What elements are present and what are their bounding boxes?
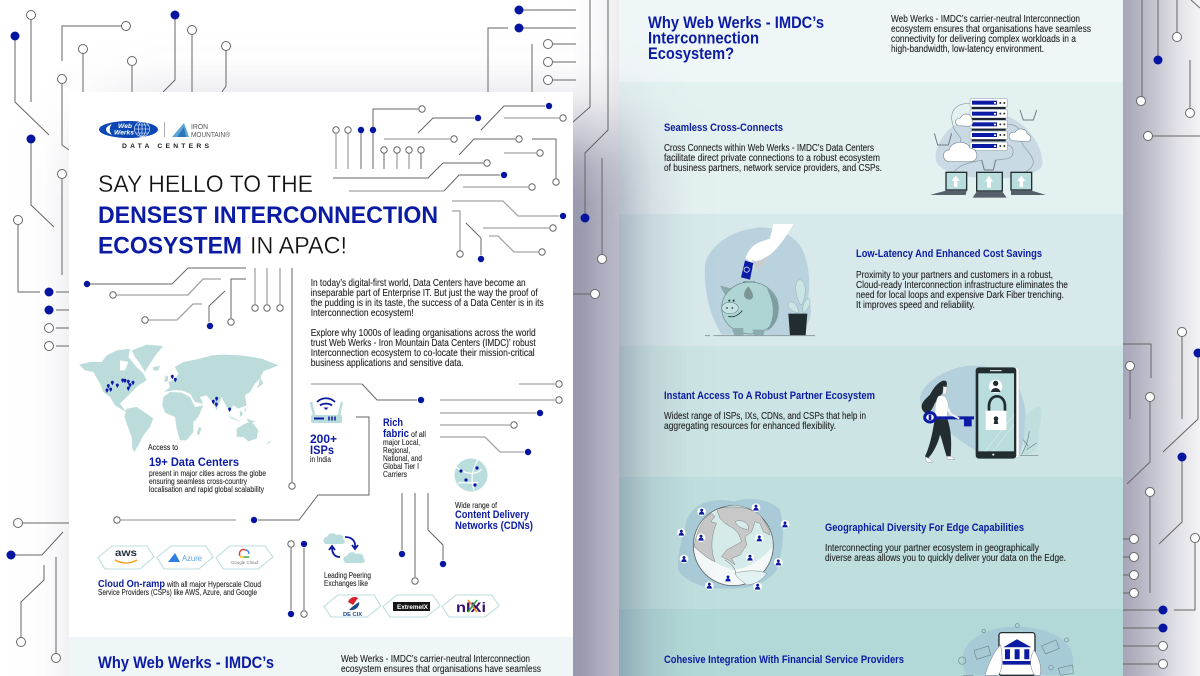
heading: why web werks: Interconnection (648, 30, 759, 48)
section: low-latency and cost savings: Proximity to your partners and customers in a robust, (856, 270, 1053, 281)
text: intro paragraphs: Explore why 1000s of leading organisations across the world (311, 328, 536, 339)
section: low-latency and cost savings: need for local loops and expensive Dark Fiber trenching. (856, 290, 1064, 301)
icon: clouds with exchange arrows (323, 533, 365, 563)
badge: de-cix: DE CIX (343, 612, 362, 618)
text: lower strip intro: Web Werks - IMDC’s carrier-neutral Interconnection (341, 654, 530, 665)
text: cloud on-ramp: Cloud On-ramp (98, 578, 165, 590)
text: 19+ data centers: Access to (148, 443, 178, 452)
circuit: page traces (84, 103, 566, 617)
text: 200+ ISPs: ISPs (310, 443, 334, 457)
text: 19+ data centers (148, 443, 266, 494)
text: cloud on-ramp: with all major Hyperscale Cloud (166, 580, 261, 589)
badge: extremeix: ExtremeIX (397, 604, 429, 611)
section: low-latency and cost savings (856, 248, 1068, 311)
heading: why web werks, lower strip: Why Web Werks - IMDC’s (98, 654, 274, 672)
logo: web werks and iron mountain data centers: MOUNTAIN® (191, 130, 230, 139)
text: leading peering exchanges: Exchanges like (324, 579, 368, 588)
text: intro paragraphs: trust Web Werks - Iron Mountain Data Centers (IMDC)’ robust (311, 338, 536, 349)
section: seamless cross-connects: Cross Connects within Web Werks - IMDC’s Data Centers (664, 143, 874, 154)
badge: nixi: nIXi (456, 599, 486, 615)
section: instant access to partner ecosystem: aggregating resources for enhanced flexibility. (664, 421, 836, 432)
icon: woman with key and phone lock (920, 366, 1042, 463)
text: rich fabric of carriers: major Local, (383, 438, 420, 447)
section: seamless cross-connects: facilitate direct private connections to a robust ecosystem (664, 153, 880, 164)
logo: web werks and iron mountain data centers: IRON (191, 122, 208, 131)
text: leading peering exchanges: Leading Peering (324, 571, 371, 580)
text: 200+ ISPs: in India (310, 455, 331, 464)
text: cloud on-ramp: Service Providers (CSPs) like AWS, Azure, and Google (98, 588, 257, 597)
section: seamless cross-connects: Seamless Cross-Connects (664, 122, 783, 134)
badge: aws: aws (115, 547, 137, 559)
text: intro paragraphs: Interconnection ecosystem! (311, 308, 414, 319)
section: seamless cross-connects: of business partners, network service providers, and CSPs. (664, 163, 882, 174)
badge: google cloud (216, 546, 273, 569)
text: ecosystem intro: connectivity for delivering complex workloads in a (891, 34, 1076, 45)
title: DENSEST INTERCONNECTION (98, 202, 438, 229)
text: leading peering exchanges (324, 571, 371, 588)
text: ecosystem intro: ecosystem ensures that organisations have seamless (891, 24, 1091, 35)
text: content delivery networks: Wide range of (455, 501, 498, 510)
badge: extremeix (383, 595, 440, 617)
text: intro paragraphs: In today’s digital-first world, Data Centers have become an (311, 278, 526, 289)
text: lower strip intro (341, 654, 541, 675)
text: intro paragraphs (311, 278, 544, 369)
section: geographical diversity (825, 522, 1066, 564)
logo: web werks and iron mountain data centers (99, 121, 230, 150)
text: intro paragraphs: the pudding is in its taste, the success of a Data Center is in its (311, 298, 544, 309)
section: geographical diversity: Interconnecting your partner ecosystem in geographically (825, 543, 1039, 554)
section: low-latency and cost savings: It improves speed and reliability. (856, 300, 975, 311)
icon: bank on phone with payment cards (959, 624, 1073, 675)
heading: why web werks: Why Web Werks - IMDC’s (648, 14, 824, 32)
section: geographical diversity: diverse areas allows you to quickly deliver your data on the Edge. (825, 553, 1066, 564)
title: ECOSYSTEM (98, 232, 242, 259)
badge: azure (157, 546, 213, 569)
text: 19+ data centers: localisation and rapid global scalability (149, 485, 264, 494)
icon: piggy bank with hand and plant (705, 224, 815, 336)
title (98, 171, 438, 259)
text: ecosystem intro: Web Werks - IMDC’s carrier-neutral Interconnection (891, 14, 1080, 25)
section: cohesive integration: Cohesive Integration With Financial Service Providers (664, 654, 904, 666)
logo: web werks and iron mountain data centers: DATA CENTERS (122, 143, 209, 150)
section: seamless cross-connects (664, 122, 882, 174)
text: rich fabric of carriers: Rich (383, 417, 403, 429)
section: instant access to partner ecosystem (664, 390, 875, 432)
text: intro paragraphs: business applications and sensitive data. (311, 358, 464, 369)
title: SAY HELLO TO THE (98, 171, 313, 198)
icon: cdn network globe (454, 458, 488, 492)
logo: web werks and iron mountain data centers: Werks (114, 130, 134, 137)
section: low-latency and cost savings: Low-Latency And Enhanced Cost Savings (856, 248, 1042, 260)
heading: why web werks: Ecosystem? (648, 45, 734, 63)
section: instant access to partner ecosystem: Instant Access To A Robust Partner Ecosystem (664, 390, 875, 402)
text: rich fabric of carriers: Global Tier I (383, 462, 419, 471)
text: 19+ data centers: 19+ Data Centers (149, 457, 239, 469)
text: rich fabric of carriers (383, 417, 426, 479)
text: content delivery networks: Content Delivery (455, 509, 529, 521)
badge: nixi (442, 595, 499, 617)
text: rich fabric of carriers: Carriers (383, 470, 407, 479)
logo: web werks and iron mountain data centers: Web (118, 123, 132, 130)
heading: why web werks (648, 14, 824, 63)
section: low-latency and cost savings: Cloud-ready Interconnection infrastructure eliminates the (856, 280, 1068, 291)
title: IN APAC! (250, 232, 347, 259)
icon: wifi router (311, 398, 342, 423)
text: 19+ data centers: present in major cities across the globe (149, 469, 266, 478)
text: cloud on-ramp (98, 578, 261, 597)
text: rich fabric of carriers: of all (411, 430, 426, 439)
text: 200+ ISPs (310, 432, 337, 464)
badge: google cloud: Google Cloud (231, 560, 259, 565)
badge: de-cix (324, 595, 381, 618)
badge: aws (98, 546, 154, 569)
text: rich fabric of carriers: National, and (383, 454, 422, 463)
section: instant access to partner ecosystem: Widest range of ISPs, IXs, CDNs, and CSPs that help in (664, 411, 866, 422)
text: lower strip intro: ecosystem ensures that organisations have seamless (341, 664, 541, 675)
text: 19+ data centers: ensuring seamless cross-country (149, 477, 247, 486)
text: rich fabric of carriers: Regional, (383, 446, 410, 455)
text: intro paragraphs: Interconnection ecosystem to co-locate their mission-critical (311, 348, 535, 359)
text: 200+ ISPs: 200+ (310, 432, 337, 446)
text: rich fabric of carriers: fabric (383, 428, 409, 440)
text: intro paragraphs: inseparable part of Enterprise IT. But just the way the proof of (311, 288, 538, 299)
text: content delivery networks (455, 501, 533, 532)
chart: world map of data centers (79, 345, 278, 452)
section: geographical diversity: Geographical Diversity For Edge Capabilities (825, 522, 1024, 534)
text: ecosystem intro (891, 14, 1091, 55)
icon: globe with connected people (677, 499, 789, 591)
badge: azure: Azure (182, 554, 203, 563)
text: content delivery networks: Networks (CDNs) (455, 520, 533, 532)
text: ecosystem intro: high-bandwidth, low-latency environment. (891, 44, 1044, 55)
icon: servers, clouds and laptops (930, 99, 1046, 198)
